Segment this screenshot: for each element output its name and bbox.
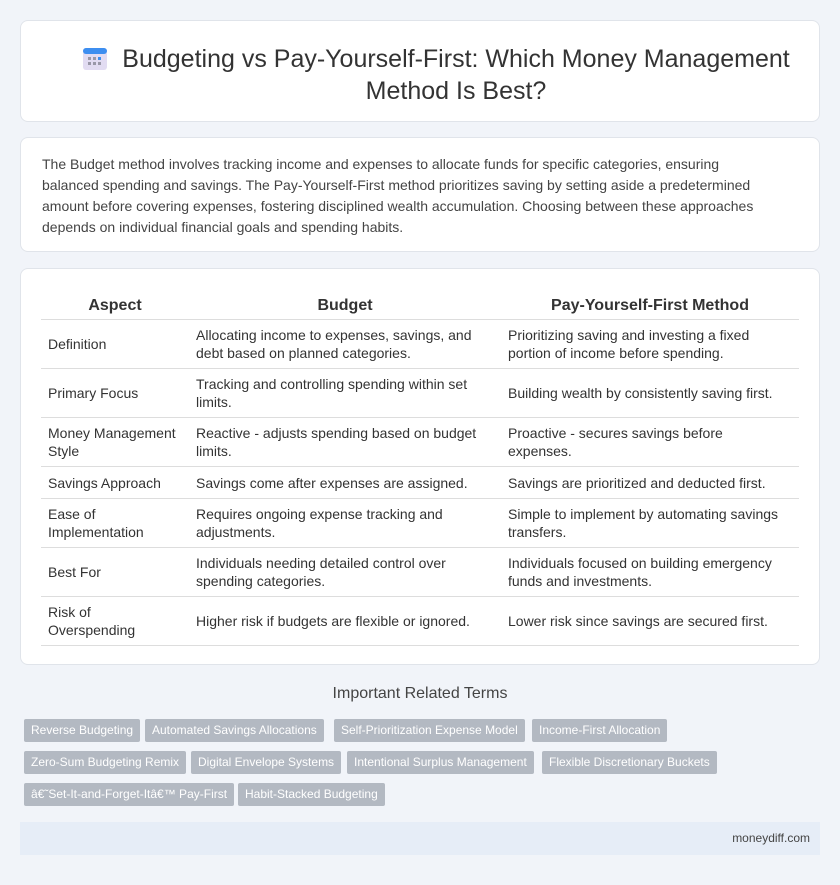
comparison table: Tracking and controlling spending within set limits. xyxy=(196,376,467,410)
comparison table: Overspending xyxy=(48,622,135,638)
comparison table: Prioritizing saving and investing a fixed portion of income before spending. xyxy=(508,327,749,361)
comparison table: Pay-Yourself-First Method xyxy=(551,297,749,314)
comparison table: Aspect xyxy=(88,297,142,314)
text: Habit-Stacked Budgeting xyxy=(245,787,378,801)
header card xyxy=(20,20,820,122)
text: Zero-Sum Budgeting Remix xyxy=(31,755,179,769)
comparison table: Simple to implement by automating savings transfers. xyxy=(508,506,778,540)
footer: moneydiff.com xyxy=(732,831,810,845)
comparison table: Definition xyxy=(48,336,106,352)
text: â€˜Set-It-and-Forget-Itâ€™ Pay-First xyxy=(31,787,227,801)
comparison table: Building wealth by consistently saving first. xyxy=(508,385,773,401)
title: Budgeting vs Pay-Yourself-First: Which Money Management Method Is Best? xyxy=(122,45,790,105)
comparison table: Ease of Implementation xyxy=(48,506,144,540)
text: Reverse Budgeting xyxy=(31,723,133,737)
comparison table: Savings come after expenses are assigned. xyxy=(196,474,468,490)
text: Automated Savings Allocations xyxy=(152,723,317,737)
intro text: The Budget method involves tracking income and expenses to allocate funds for specific categories, ensuring balanced spending and savings. The Pay-Yourself-First method prioritizes saving by setting aside a predetermined amount before covering expenses, fostering disciplined wealth accumulation. Choosing between these approaches depends on individual financial goals and spending habits. xyxy=(42,156,753,235)
text: Digital Envelope Systems xyxy=(198,755,334,769)
comparison table: Lower risk since savings are secured first. xyxy=(508,613,768,629)
comparison table: Savings are prioritized and deducted first. xyxy=(508,474,766,490)
comparison table: Budget xyxy=(317,297,373,314)
comparison table: Best For xyxy=(48,564,101,580)
intro text xyxy=(20,137,820,252)
comparison table: Proactive - secures savings before expenses. xyxy=(508,425,723,459)
comparison table: Requires ongoing expense tracking and adjustments. xyxy=(196,506,443,540)
comparison table: Savings Approach xyxy=(48,474,161,490)
comparison table: Reactive - adjusts spending based on budget limits. xyxy=(196,425,476,459)
comparison table: Primary Focus xyxy=(48,385,138,401)
comparison table: Allocating income to expenses, savings, and debt based on planned categories. xyxy=(196,327,472,361)
comparison table xyxy=(20,268,820,665)
comparison table: Risk of xyxy=(48,604,91,620)
tags xyxy=(24,719,717,806)
comparison table: Individuals needing detailed control over spending categories. xyxy=(196,555,446,589)
comparison table: Higher risk if budgets are flexible or ignored. xyxy=(196,613,470,629)
text: Intentional Surplus Management xyxy=(354,755,527,769)
text: Self-Prioritization Expense Model xyxy=(341,723,518,737)
icon: calendar xyxy=(83,48,107,70)
footer xyxy=(20,822,820,855)
comparison table: Money Management Style xyxy=(48,425,176,459)
text: Flexible Discretionary Buckets xyxy=(549,755,710,769)
related terms heading: Important Related Terms xyxy=(333,685,507,702)
text: Income-First Allocation xyxy=(539,723,660,737)
comparison table: Individuals focused on building emergency funds and investments. xyxy=(508,555,772,589)
